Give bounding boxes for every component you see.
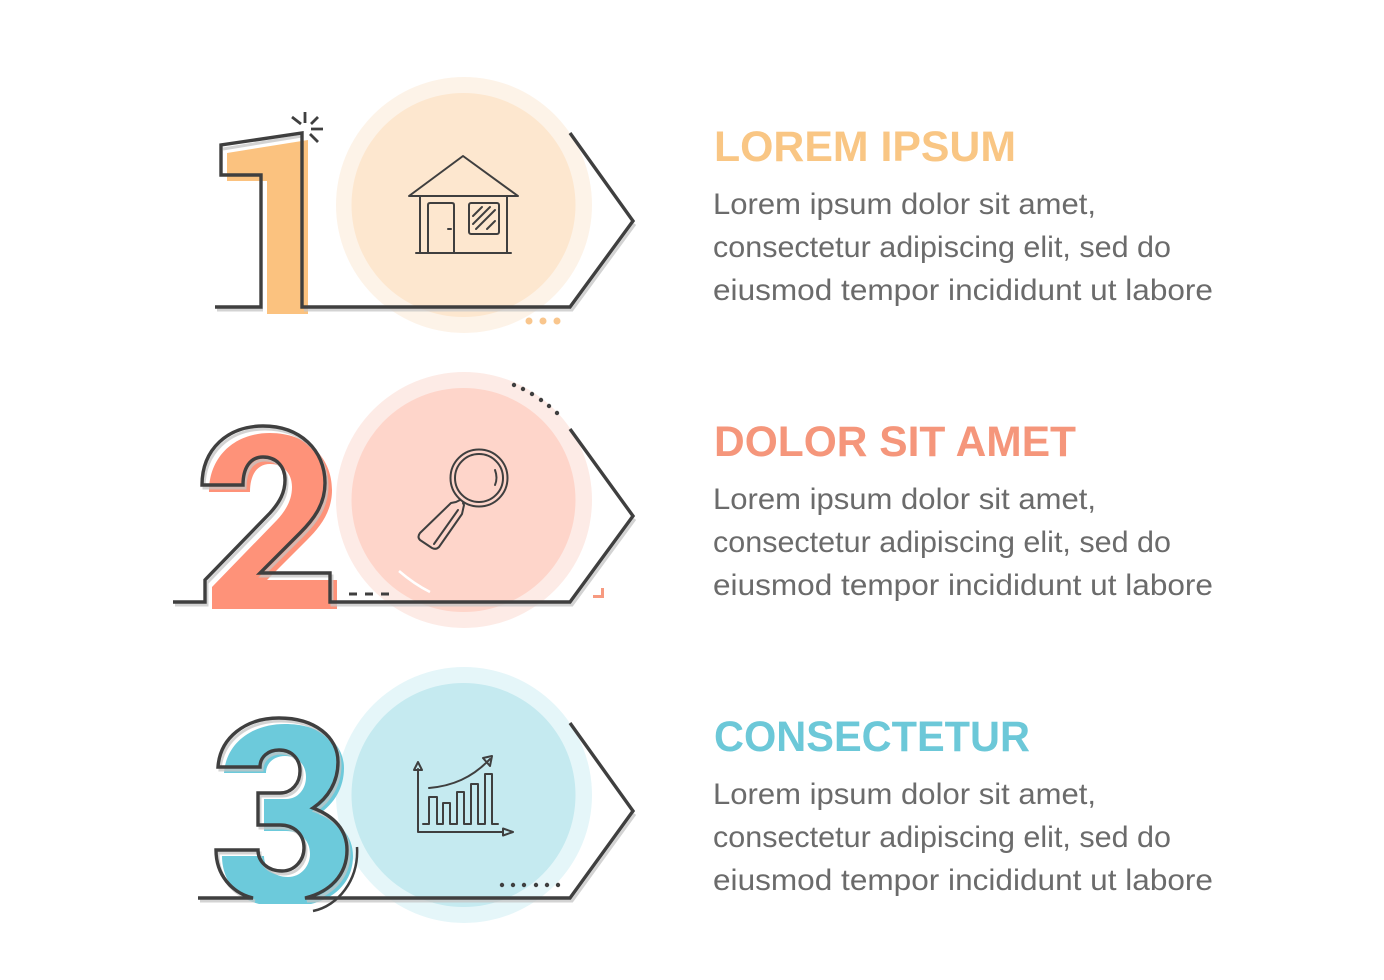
- icon: magnifying glass: [418, 450, 508, 549]
- orange corner mark: [593, 588, 602, 596]
- body: step 3: consectetur adipiscing elit, sed do: [713, 821, 1171, 854]
- panel: step 1 text: [713, 123, 1213, 307]
- inner circle 2: [352, 388, 576, 612]
- icon: sparkle: [292, 112, 323, 142]
- inner circle 1: [352, 93, 576, 317]
- numeral 1 and arrow outline: [215, 133, 633, 307]
- panel: step 3 text: [713, 713, 1213, 897]
- numeral 3 and arrow outline: [198, 718, 633, 898]
- body: step 1: [713, 188, 1213, 307]
- body: step 1: consectetur adipiscing elit, sed do: [713, 231, 1171, 264]
- curved accent line: [313, 847, 357, 911]
- body: step 1: Lorem ipsum dolor sit amet,: [713, 188, 1096, 221]
- body: step 2: eiusmod tempor incididunt ut labore: [713, 569, 1213, 602]
- body: step 1: eiusmod tempor incididunt ut labore: [713, 274, 1213, 307]
- body: step 3: eiusmod tempor incididunt ut labore: [713, 864, 1213, 897]
- heading: step 1: LOREM IPSUM: [714, 123, 1016, 171]
- body: step 2: consectetur adipiscing elit, sed do: [713, 526, 1171, 559]
- outer circle 3: [336, 667, 592, 923]
- body: step 3: [713, 778, 1213, 897]
- numeral 3 fill: [222, 724, 353, 904]
- panel: step 3 graphic: [198, 667, 635, 923]
- numeral 2 and arrow shadow: [175, 429, 635, 605]
- numeral 2 and arrow outline: [173, 426, 633, 602]
- heading: step 2: DOLOR SIT AMET: [714, 418, 1076, 466]
- three orange dots: [526, 318, 560, 324]
- numeral 2 fill: [209, 433, 337, 609]
- icon: growth chart: [414, 756, 513, 836]
- outer circle 1: [336, 77, 592, 333]
- dotted line: [500, 883, 560, 887]
- white highlight arc: [399, 571, 430, 592]
- numeral 1 fill: [227, 140, 308, 314]
- dashes: [349, 592, 389, 596]
- outer circle 2: [336, 372, 592, 628]
- numeral 3 and arrow shadow: [200, 721, 635, 901]
- numeral 1 and arrow shadow: [217, 136, 635, 310]
- panel: step 1 graphic: [215, 77, 635, 333]
- dotted arc: [512, 383, 559, 415]
- heading: step 3: CONSECTETUR: [714, 713, 1030, 761]
- body: step 2: [713, 483, 1213, 602]
- panel: step 2 graphic: [173, 372, 635, 628]
- panel: step 2 text: [713, 418, 1213, 602]
- body: step 2: Lorem ipsum dolor sit amet,: [713, 483, 1096, 516]
- inner circle 3: [352, 683, 576, 907]
- body: step 3: Lorem ipsum dolor sit amet,: [713, 778, 1096, 811]
- icon: house: [409, 156, 518, 253]
